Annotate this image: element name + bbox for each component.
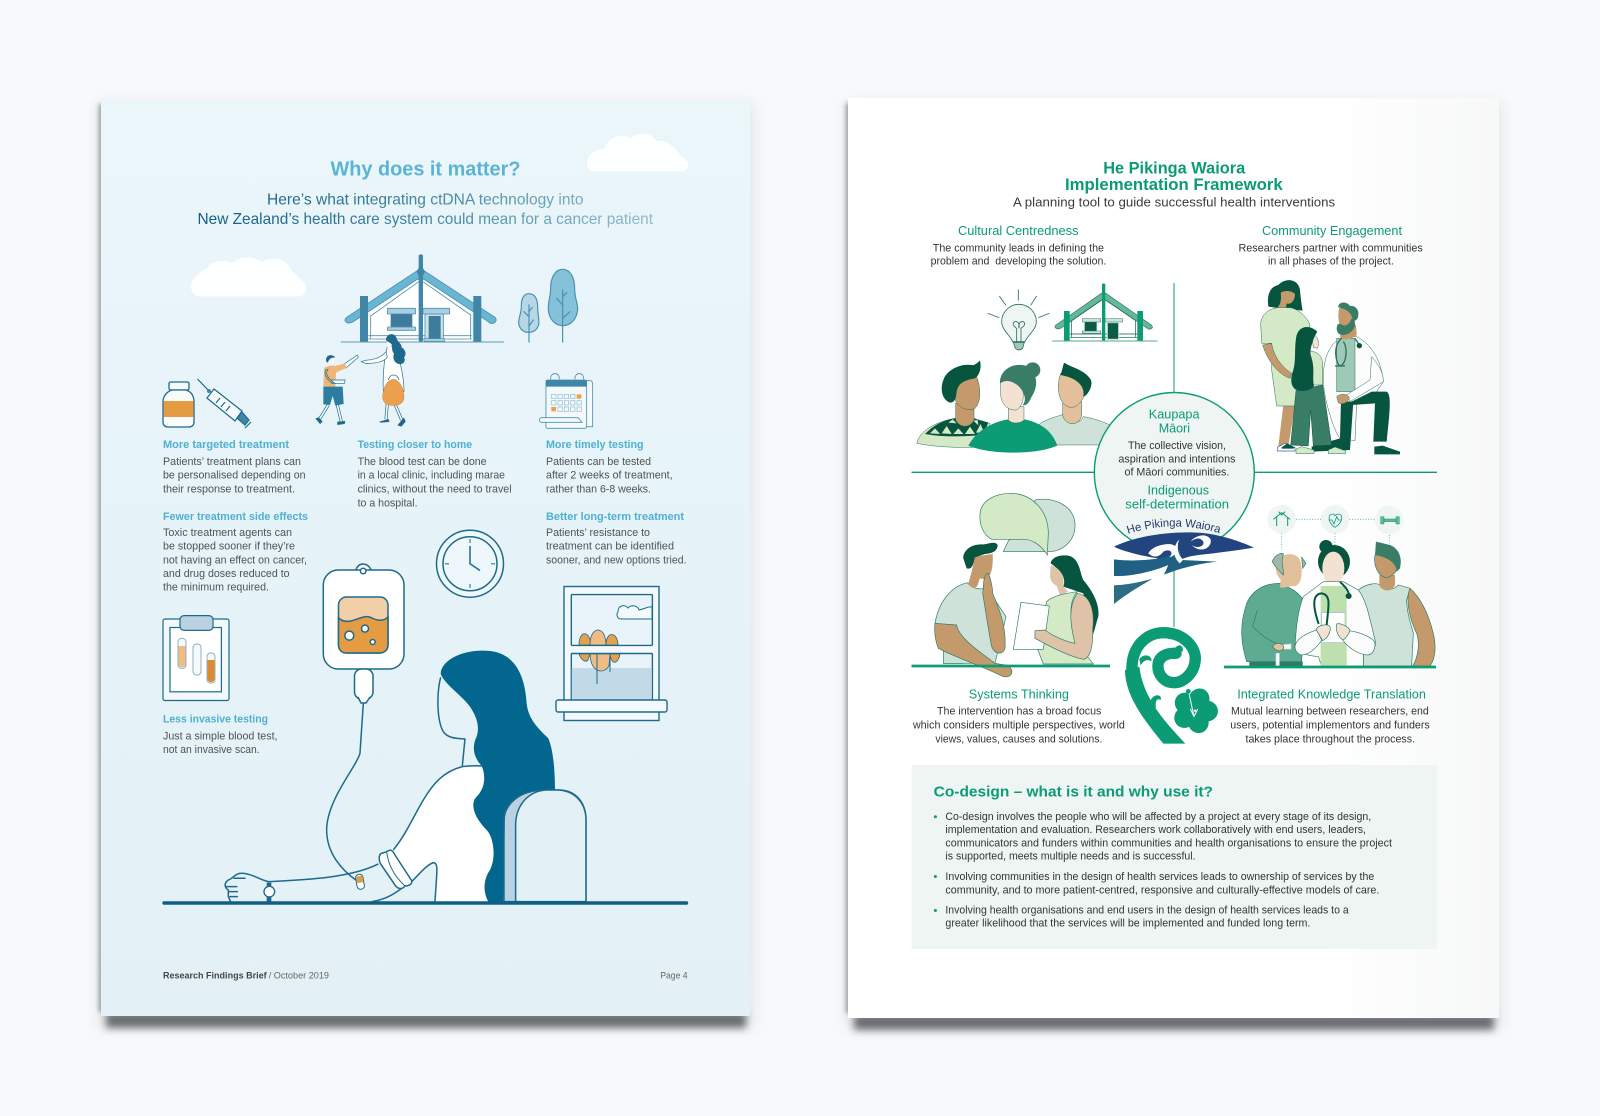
text block: more targeted treatment: Patients’ treatment plans can xyxy=(163,456,301,468)
icon: house xyxy=(1273,512,1290,526)
icon: marae house xyxy=(341,254,504,342)
text block: fewer treatment side effects xyxy=(163,511,308,593)
illustration: window xyxy=(556,586,667,720)
bullet text: community, and to more patient-centred, responsive and culturally-effective models of care. xyxy=(945,885,1379,897)
bullet text: Co-design involves the people who will be affected by a project at every stage of its design, xyxy=(945,811,1371,823)
text block: cultural centredness xyxy=(931,223,1106,268)
illustration: knowledge translation people xyxy=(1242,505,1435,666)
bullet text: is supported, meets multiple needs and is successful. xyxy=(945,851,1196,863)
text block: systems thinking xyxy=(912,686,1125,745)
watch xyxy=(267,883,271,902)
icon: green marae house xyxy=(1052,283,1158,341)
panel: Kaupapa Maori circle: The collective vision, xyxy=(1128,440,1226,452)
title: He Pikinga Waiora xyxy=(1103,159,1246,177)
illustration: child and woman xyxy=(315,334,406,427)
logo: He Pikinga Waiora xyxy=(1114,518,1254,604)
icon: koru with hibiscus xyxy=(1125,633,1218,744)
icon: IV bag xyxy=(323,564,404,703)
icon: dumbbell xyxy=(1381,517,1399,524)
text block: more timely testing xyxy=(546,439,673,496)
panel: Kaupapa Maori circle: aspiration and intentions xyxy=(1118,454,1236,466)
text block: community engagement: Community Engagement xyxy=(1262,223,1402,238)
older man xyxy=(1249,661,1303,666)
text block: less invasive testing: Less invasive testing xyxy=(163,714,268,726)
text block: community engagement: in all phases of the project. xyxy=(1268,256,1394,268)
text block: more targeted treatment xyxy=(163,439,306,496)
panel: Kaupapa Maori circle: of Māori communities. xyxy=(1124,467,1229,479)
text block: better long-term treatment: Better long-term treatment xyxy=(546,511,684,523)
logo: He Pikinga Waiora: He Pikinga Waiora xyxy=(1126,518,1220,534)
subheading: New Zealand’s health care system could mean for a cancer patient xyxy=(198,211,654,228)
text block: testing closer to home: The blood test can be done xyxy=(358,456,487,468)
icon: heart xyxy=(1329,514,1342,527)
illustration: systems thinking people xyxy=(935,493,1099,677)
panel: co-design box xyxy=(912,765,1437,949)
text block: fewer treatment side effects: and drug doses reduced to xyxy=(163,568,290,580)
bullet text: communicators and funders within communities and health organisations to ensure the project xyxy=(945,838,1392,850)
text block: better long-term treatment xyxy=(546,511,686,566)
text block: cultural centredness: Cultural Centredness xyxy=(958,223,1079,238)
icon: syringe xyxy=(198,379,251,428)
text block: more timely testing: Patients can be tested xyxy=(546,456,651,468)
heading: Why does it matter? xyxy=(330,158,520,180)
icon: calendar xyxy=(539,374,593,428)
text block: less invasive testing: Just a simple blood test, xyxy=(163,730,278,742)
icon: light bulb xyxy=(988,289,1049,350)
icon circles xyxy=(1267,505,1404,534)
subheading xyxy=(198,192,654,228)
dividers xyxy=(912,283,1437,627)
bullet text: implementation and evaluation. Researchers work collaboratively with end users, leaders, xyxy=(945,824,1366,836)
text block: cultural centredness: problem and developing the solution. xyxy=(931,256,1106,268)
text block: cultural centredness: The community leads in defining the xyxy=(933,242,1104,254)
girl xyxy=(1291,385,1332,446)
text block: integrated knowledge translation: Mutual learning between researchers, end xyxy=(1231,705,1429,717)
woman legs xyxy=(386,403,402,420)
child shirt xyxy=(323,363,346,387)
text block: community engagement: Researchers partner with communities xyxy=(1238,242,1423,254)
text block: systems thinking: Systems Thinking xyxy=(969,686,1069,701)
title xyxy=(1065,159,1284,194)
bullet text xyxy=(945,811,1392,930)
woman dress xyxy=(383,346,404,392)
footer xyxy=(163,970,688,981)
cannula xyxy=(355,874,365,890)
doctor xyxy=(1319,540,1333,553)
text block: less invasive testing xyxy=(163,714,278,756)
bullet text: Involving communities in the design of health services leads to ownership of services by the xyxy=(945,871,1374,883)
icon: clock xyxy=(436,530,504,597)
head outline xyxy=(438,677,465,766)
panel: left page xyxy=(98,99,754,1028)
text block: testing closer to home: Testing closer to home xyxy=(358,439,472,451)
panel: right page xyxy=(842,100,1504,1036)
text block: more timely testing: More timely testing xyxy=(546,439,644,451)
text block: more targeted treatment: be personalised depending on xyxy=(163,470,306,482)
footer: Research Findings Brief xyxy=(163,970,267,981)
panel: Kaupapa Maori circle: Māori xyxy=(1159,421,1190,436)
footer: Page 4 xyxy=(660,970,688,981)
child forearm xyxy=(344,355,358,368)
panel: Kaupapa Maori circle: self-determination xyxy=(1125,497,1229,512)
title: Implementation Framework xyxy=(1065,176,1284,194)
text block: better long-term treatment: sooner, and new options tried. xyxy=(546,554,686,566)
text block: integrated knowledge translation: takes place throughout the process. xyxy=(1246,733,1415,745)
text block: fewer treatment side effects: the minimum required. xyxy=(163,581,269,593)
text block: fewer treatment side effects: Toxic treatment agents can xyxy=(163,527,292,539)
bullet text: Involving health organisations and end users in the design of health services leads to a xyxy=(945,905,1349,917)
hand xyxy=(225,873,268,902)
footer: / October 2019 xyxy=(269,970,329,981)
child head xyxy=(326,356,335,364)
text block: testing closer to home xyxy=(358,439,512,510)
speech bubbles xyxy=(1003,499,1075,552)
text block: more targeted treatment: their response to treatment. xyxy=(163,484,295,496)
icon: medicine bottle xyxy=(163,382,194,427)
panel: Kaupapa Maori circle xyxy=(1094,392,1254,552)
middle person xyxy=(968,419,1057,453)
hibiscus flower xyxy=(1170,686,1218,736)
text block: fewer treatment side effects: Fewer treatment side effects xyxy=(163,511,308,523)
text block: integrated knowledge translation xyxy=(1230,686,1430,745)
mother xyxy=(1268,280,1303,311)
text block: testing closer to home: to a hospital. xyxy=(358,498,418,510)
table line: systems thinking xyxy=(912,665,1110,667)
torso outline xyxy=(393,766,482,902)
table xyxy=(164,901,686,905)
torso xyxy=(380,766,494,902)
right man xyxy=(1358,584,1413,666)
text block: more targeted treatment: More targeted treatment xyxy=(163,439,289,451)
right person xyxy=(1038,414,1110,445)
subtitle: A planning tool to guide successful health interventions xyxy=(1013,195,1336,210)
chair front xyxy=(516,790,586,902)
text block: integrated knowledge translation: users, potential implementors and funders xyxy=(1230,719,1430,731)
bullets xyxy=(934,815,937,912)
doctor coat xyxy=(1323,337,1383,441)
illustration: three people xyxy=(917,361,1110,453)
co-design heading: Co-design – what is it and why use it? xyxy=(934,784,1213,801)
woman head and hair xyxy=(387,339,391,347)
text block: testing closer to home: in a local clinic, including marae xyxy=(358,470,505,482)
bullet text: greater likelihood that the services will be implemented and funded long term. xyxy=(945,918,1310,930)
table line: knowledge translation xyxy=(1224,666,1436,668)
panel: Kaupapa Maori circle: Kaupapa xyxy=(1149,406,1200,421)
cloud: top right xyxy=(587,134,688,172)
chair xyxy=(504,790,586,902)
text block: better long-term treatment: Patients’ resistance to xyxy=(546,527,650,539)
cloud: middle xyxy=(191,258,306,296)
woman bag xyxy=(383,379,404,405)
arm xyxy=(268,864,402,902)
hair xyxy=(441,651,555,902)
IV tube xyxy=(327,703,363,881)
text block: fewer treatment side effects: be stopped sooner if they’re xyxy=(163,541,295,553)
left person xyxy=(917,418,990,447)
sleeve cuff xyxy=(379,850,412,889)
text block: systems thinking: views, values, causes and solutions. xyxy=(935,733,1102,745)
text block: community engagement xyxy=(1238,223,1423,268)
text block: integrated knowledge translation: Integrated Knowledge Translation xyxy=(1237,686,1426,701)
text block: testing closer to home: clinics, without the need to travel xyxy=(358,484,512,496)
illustration: family and doctor xyxy=(1261,280,1400,454)
subheading: Here’s what integrating ctDNA technology into xyxy=(267,192,584,208)
text block: less invasive testing: not an invasive scan. xyxy=(163,744,260,756)
panel: Kaupapa Maori circle: Indigenous xyxy=(1148,483,1209,498)
illustration: patient at table xyxy=(225,651,586,902)
child shorts xyxy=(323,387,344,406)
icon: clipboard with test tubes xyxy=(163,616,229,700)
text block: better long-term treatment: treatment can be identified xyxy=(546,541,674,553)
text block: systems thinking: which considers multiple perspectives, world xyxy=(912,719,1125,731)
woman xyxy=(1051,555,1099,637)
man xyxy=(943,657,965,664)
child legs xyxy=(319,405,341,422)
text block: more timely testing: rather than 6-8 weeks. xyxy=(546,484,651,496)
icon: trees xyxy=(519,269,578,342)
text block: more timely testing: after 2 weeks of treatment, xyxy=(546,470,673,482)
text block: systems thinking: The intervention has a broad focus xyxy=(937,705,1102,717)
text block: fewer treatment side effects: not having an effect on cancer, xyxy=(163,554,307,566)
